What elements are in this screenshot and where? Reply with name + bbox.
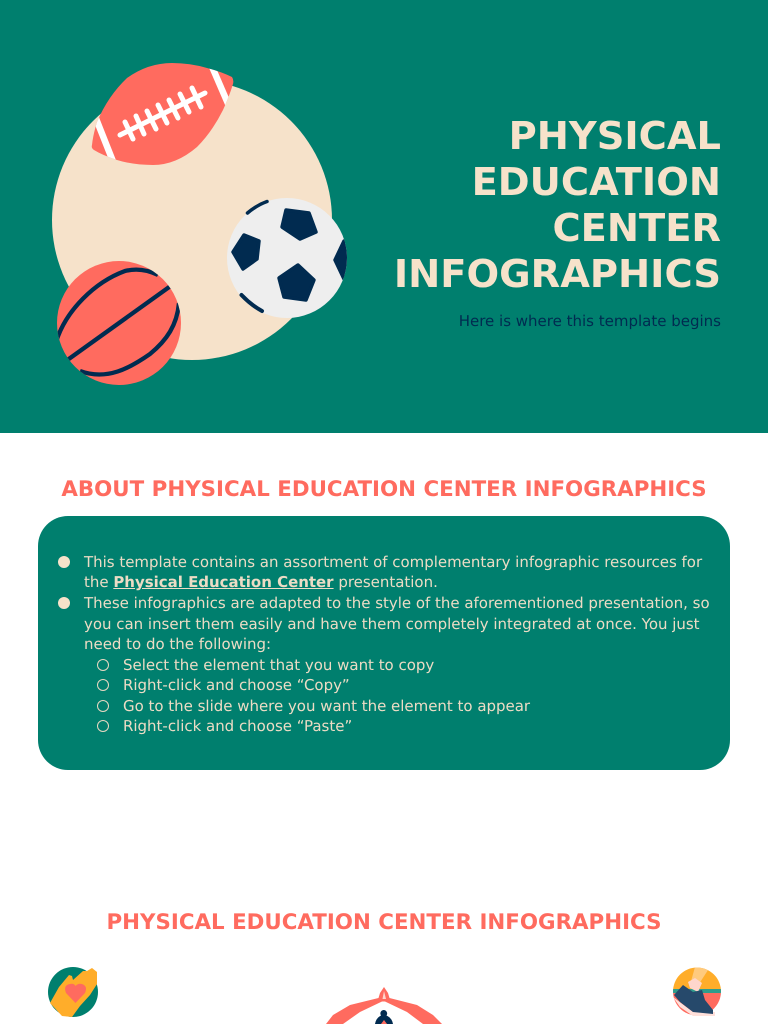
bullet list: Select the element that you want to copy	[123, 656, 434, 674]
bullet list: you can insert them easily and have them completely integrated at once. You just	[84, 615, 700, 633]
title: PHYSICAL	[509, 114, 721, 159]
bullet list	[58, 553, 710, 735]
heading: about: ABOUT PHYSICAL EDUCATION CENTER INFOGRAPHICS	[61, 477, 707, 502]
icon: hand with heart	[48, 967, 98, 1017]
icon: running shoe	[673, 968, 721, 1016]
subtitle: Here is where this template begins	[459, 312, 721, 330]
header band	[0, 0, 768, 433]
title: INFOGRAPHICS	[394, 252, 721, 297]
icon: american football	[92, 62, 233, 165]
sports balls illustration	[52, 63, 347, 385]
bullet list: This template contains an assortment of complementary infographic resources for	[84, 553, 702, 571]
panel: about text	[38, 516, 730, 770]
bullet list: Right-click and choose “Copy”	[123, 676, 350, 694]
bullet list: These infographics are adapted to the style of the aforementioned presentation, so	[84, 594, 710, 612]
title: EDUCATION	[472, 160, 721, 205]
cream circle	[52, 80, 332, 360]
bullet list: the Physical Education Center presentation.	[84, 573, 438, 591]
icon: yoga figure	[326, 987, 442, 1024]
bullet list: Go to the slide where you want the element to appear	[123, 697, 530, 715]
title: CENTER	[552, 206, 721, 251]
bullet list: need to do the following:	[84, 635, 271, 653]
title	[394, 114, 721, 297]
heading: infographics: PHYSICAL EDUCATION CENTER INFOGRAPHICS	[106, 910, 661, 935]
icon: basketball	[56, 261, 181, 385]
bullet list: Right-click and choose “Paste”	[123, 717, 352, 735]
icon: soccer ball	[227, 198, 352, 318]
